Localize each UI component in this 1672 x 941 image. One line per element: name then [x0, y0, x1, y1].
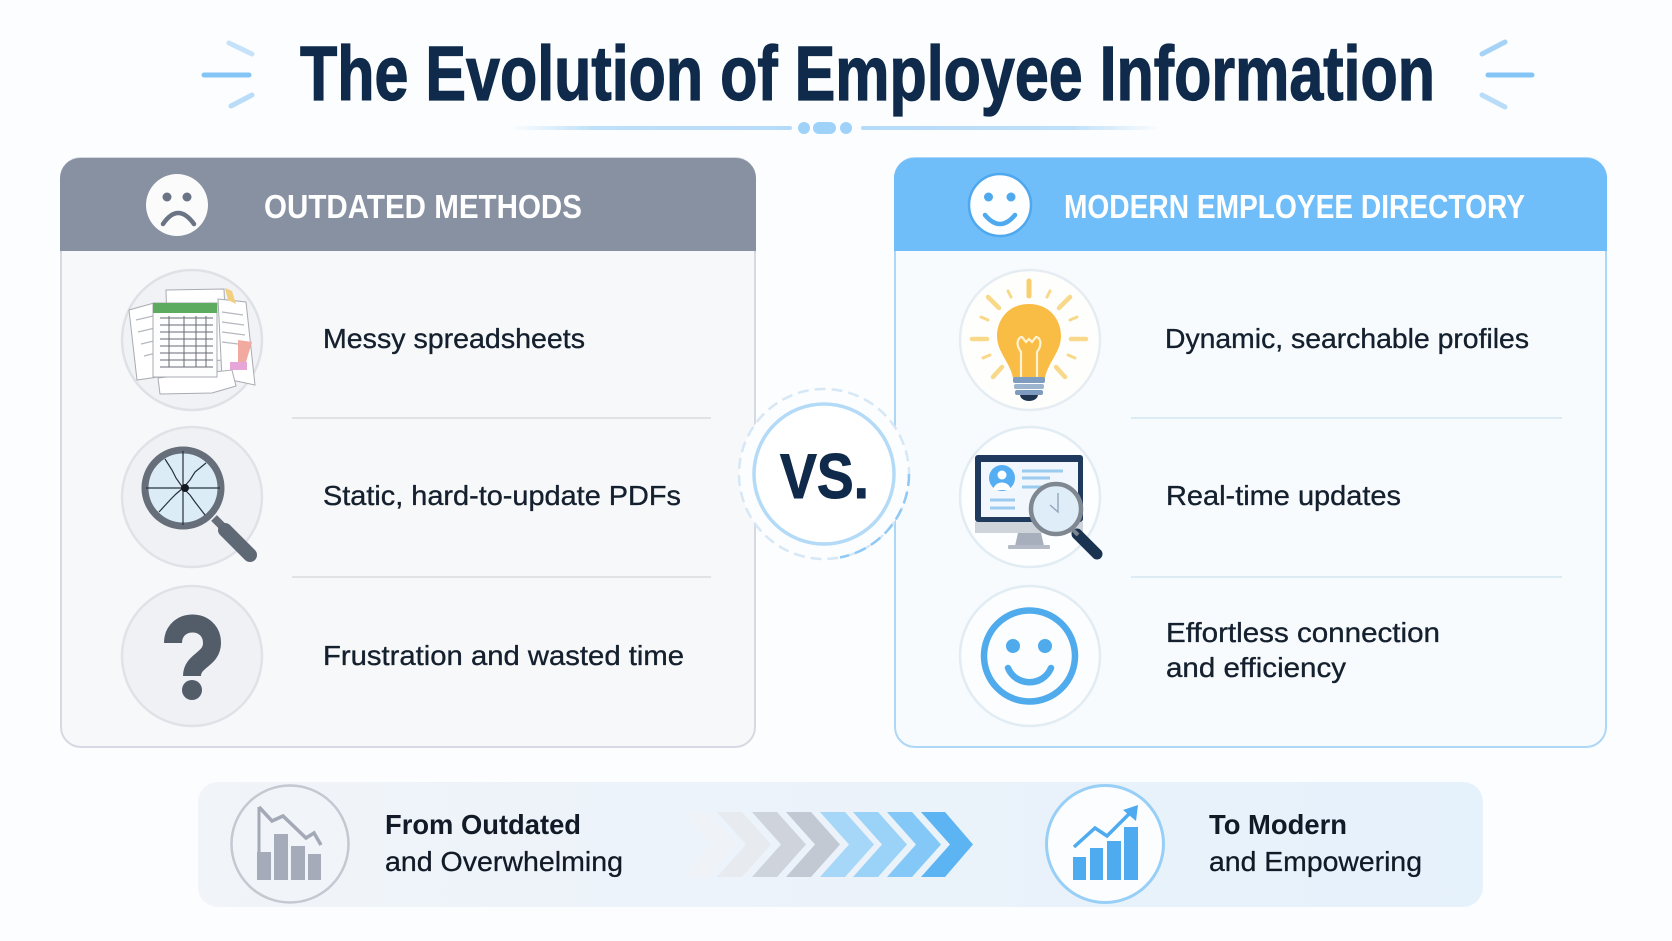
- icon: light bulb: [960, 270, 1100, 410]
- label: to modern: and Empowering: [1209, 846, 1422, 877]
- panel: outdated methods: [60, 158, 756, 747]
- row: dynamic profiles: [960, 270, 1529, 410]
- heading: outdated methods: OUTDATED METHODS: [264, 188, 582, 225]
- panel body: [61, 158, 755, 747]
- row: frustration: [122, 586, 684, 726]
- label: dynamic profiles: Dynamic, searchable profiles: [1165, 323, 1529, 354]
- icon: cracked magnifying glass: [122, 427, 262, 567]
- icon: question mark: [122, 586, 262, 726]
- panel header bar: [60, 158, 756, 251]
- row: real-time updates: [960, 427, 1401, 567]
- label: frustration: Frustration and wasted time: [323, 640, 684, 671]
- label: to modern: To Modern: [1209, 809, 1347, 840]
- arrow: chevron progression: [683, 812, 973, 877]
- icon: declining chart: [232, 786, 348, 902]
- row: messy spreadsheets: [122, 270, 585, 410]
- row: effortless connection: [960, 586, 1440, 726]
- label: from outdated: From Outdated: [385, 809, 581, 840]
- panel: modern employee directory: [894, 158, 1607, 747]
- row: static PDFs: [122, 427, 681, 567]
- bottom transition band: [198, 782, 1483, 907]
- icon: monitor with magnifier: [960, 427, 1100, 567]
- title underline with dots: [510, 122, 1161, 134]
- heading: modern employee directory: MODERN EMPLOYEE DIRECTORY: [1064, 188, 1525, 225]
- icon: messy spreadsheets: [122, 270, 262, 410]
- label: to modern: [1209, 809, 1422, 877]
- icon: rising chart: [1046, 786, 1164, 902]
- VS badge: [739, 389, 909, 559]
- icon: happy face: [969, 174, 1031, 236]
- icon: sad face: [146, 174, 208, 236]
- icon: smiley: [960, 586, 1100, 726]
- label: real-time updates: Real-time updates: [1166, 480, 1401, 511]
- label: effortless connection: and efficiency: [1166, 652, 1346, 683]
- panel body: [895, 158, 1606, 747]
- icon: left title sparkle: [204, 43, 252, 106]
- band background: [198, 782, 1483, 907]
- panel header bar: [894, 158, 1607, 251]
- label: effortless connection: [1166, 617, 1440, 683]
- label: from outdated: [385, 809, 623, 877]
- label: effortless connection: Effortless connection: [1166, 617, 1440, 648]
- label: messy spreadsheets: Messy spreadsheets: [323, 323, 585, 354]
- icon: right title sparkle: [1482, 42, 1532, 107]
- label: from outdated: and Overwhelming: [385, 846, 623, 877]
- label: static PDFs: Static, hard-to-update PDFs: [323, 480, 681, 511]
- VS badge: VS.: [780, 442, 869, 512]
